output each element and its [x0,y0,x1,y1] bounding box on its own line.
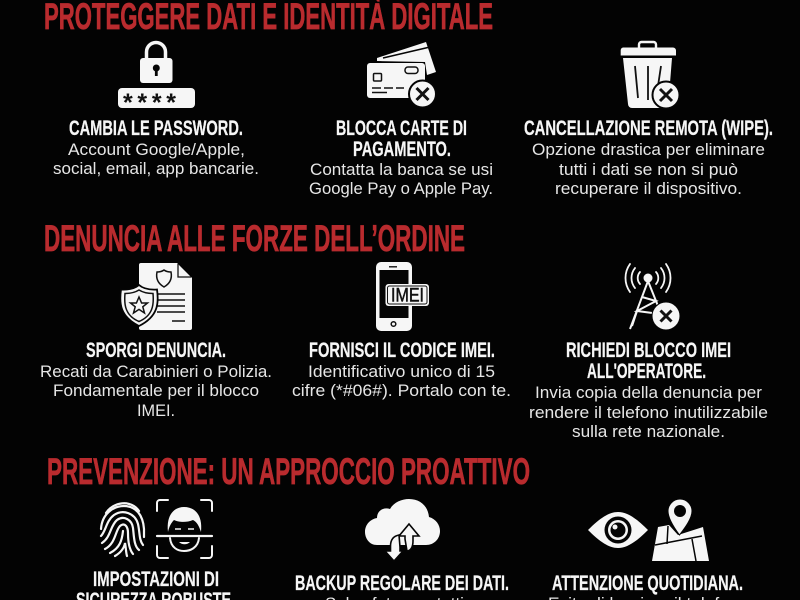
title: cambia le password: CAMBIA LE PASSWORD. [69,117,243,140]
panel: backup [295,499,509,600]
text: fornisci imei [292,362,511,400]
text: richiedi blocco: Invia copia della denuncia per [535,383,762,402]
heading: denuncia: DENUNCIA ALLE FORZE DELL’ORDINE [44,218,465,259]
title: impostazioni sicurezza: IMPOSTAZIONI DI [93,568,219,591]
text: cambia le password: Account Google/Apple, [68,140,245,159]
panel: richiedi blocco [529,264,768,441]
title: impostazioni sicurezza [76,568,231,600]
panel: cancellazione remota [524,42,773,198]
text: sporgi denuncia: Recati da Carabinieri o Polizia. [40,362,272,381]
panel: fornisci imei [292,262,511,400]
panel: sporgi denuncia [40,263,272,420]
title: blocca carte [336,117,467,161]
text: blocca carte: Contatta la banca se usi [310,160,493,179]
text: cancellazione remota [532,140,765,198]
title: richiedi blocco: RICHIEDI BLOCCO IMEI [566,339,731,362]
panel: cambia le password [53,42,259,178]
text: blocca carte: Google Pay o Apple Pay. [309,179,493,198]
panel: blocca carte [309,42,493,198]
text: richiedi blocco: rendere il telefono inutilizzabile [529,403,768,422]
text: richiedi blocco: sulla rete nazionale. [572,422,725,441]
text: cancellazione remota: tutti i dati se non si può [559,160,738,179]
icon: antenna tower with x [625,264,680,330]
title: blocca carte: PAGAMENTO. [353,138,451,161]
icon: padlock and password field: **** [123,89,176,117]
icon: phone with imei label [376,262,429,331]
icon: fingerprint and face scan [101,500,212,558]
icon: cloud with sync arrows [365,499,440,561]
text: sporgi denuncia: IMEI. [137,401,175,420]
title: sporgi denuncia: SPORGI DENUNCIA. [86,339,226,362]
text: fornisci imei: Identificativo unico di 15 [308,362,495,381]
text: fornisci imei: cifre (*#06#). Portalo con te. [292,381,511,400]
title: backup: BACKUP REGOLARE DEI DATI. [295,572,509,595]
text: cambia le password: social, email, app bancarie. [53,159,259,178]
text: richiedi blocco [529,383,768,441]
text: blocca carte [309,160,493,198]
title: blocca carte: BLOCCA CARTE DI [336,117,467,140]
title: richiedi blocco: ALL'OPERATORE. [587,360,706,383]
icon: trash bin with x [621,42,680,108]
text: cancellazione remota: recuperare il dispositivo. [555,179,742,198]
panel: attenzione quotidiana [548,499,748,600]
text: cancellazione remota: Opzione drastica per eliminare [532,140,765,159]
text: sporgi denuncia: Fondamentale per il blocco [53,381,259,400]
panel: impostazioni sicurezza [76,500,231,600]
text: cambia le password [53,140,259,178]
title: fornisci imei: FORNISCI IL CODICE IMEI. [309,339,495,362]
icon: phone with imei label: IMEI [391,286,424,306]
icon: credit cards with x [367,42,436,108]
icon: eye and map pin [588,499,709,561]
icon: police report and badge [120,263,192,330]
title: richiedi blocco [566,339,731,383]
icon: padlock and password field [118,42,195,117]
text: sporgi denuncia [40,362,272,420]
